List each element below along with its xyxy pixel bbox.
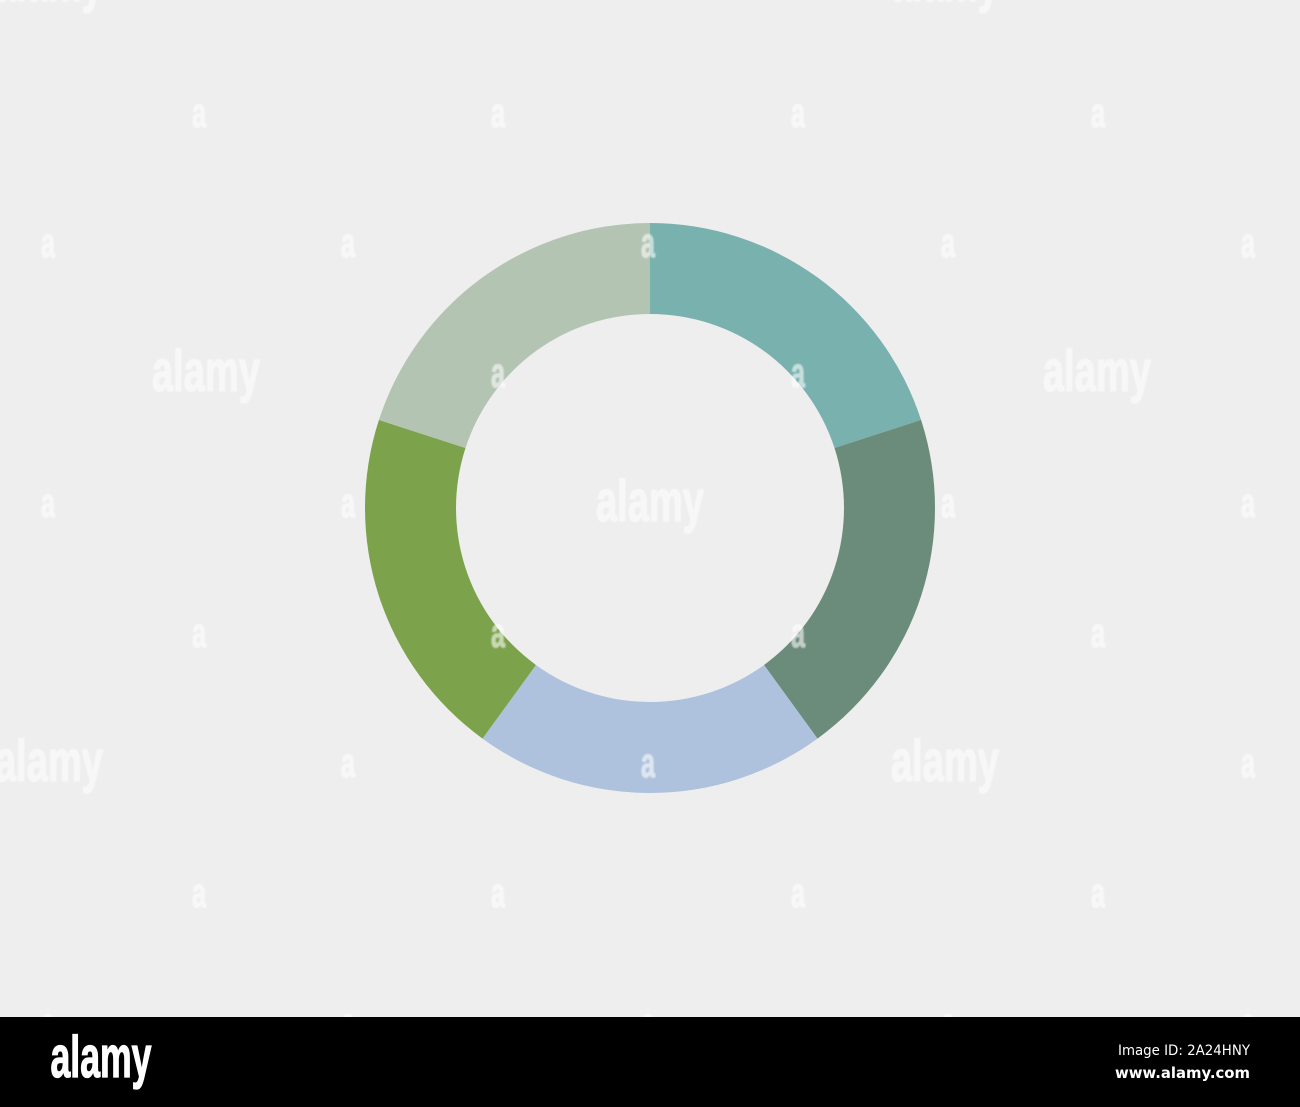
watermark pattern: a	[491, 869, 505, 916]
watermark pattern: a	[791, 349, 805, 396]
watermark pattern: a	[941, 999, 955, 1046]
segment: pale sage	[379, 223, 650, 448]
watermark pattern: a	[491, 89, 505, 136]
watermark pattern: a	[1241, 999, 1255, 1046]
donut chart	[365, 223, 935, 793]
footer logo: alamy	[50, 1025, 152, 1090]
footer bar	[0, 1017, 1300, 1107]
watermark pattern: a	[341, 999, 355, 1046]
segment: green	[365, 420, 536, 739]
watermark pattern: a	[941, 219, 955, 266]
segment: teal	[650, 223, 921, 448]
watermark pattern: a	[1241, 739, 1255, 786]
watermark pattern: a	[1091, 609, 1105, 656]
watermark pattern: a	[192, 89, 206, 136]
watermark pattern: a	[192, 869, 206, 916]
watermark pattern: a	[192, 609, 206, 656]
watermark pattern: a	[1091, 869, 1105, 916]
watermark pattern: a	[641, 219, 655, 266]
segment: light blue	[482, 665, 818, 793]
watermark pattern: a	[791, 609, 805, 656]
watermark pattern: a	[791, 869, 805, 916]
watermark pattern: a	[791, 89, 805, 136]
watermark pattern: a	[1241, 479, 1255, 526]
watermark pattern: a	[491, 349, 505, 396]
watermark pattern: alamy	[891, 729, 999, 794]
watermark pattern: a	[41, 479, 55, 526]
watermark pattern: a	[1091, 89, 1105, 136]
segment: dark green-grey	[764, 420, 935, 739]
watermark pattern: a	[1241, 219, 1255, 266]
watermark pattern: a	[41, 999, 55, 1046]
watermark pattern: a	[641, 999, 655, 1046]
watermark pattern: a	[491, 609, 505, 656]
watermark pattern: a	[641, 739, 655, 786]
watermark pattern: a	[941, 479, 955, 526]
watermark pattern: a	[341, 479, 355, 526]
watermark pattern: alamy	[152, 339, 260, 404]
watermark pattern: alamy	[1043, 339, 1151, 404]
website: www.alamy.com	[1115, 1064, 1250, 1082]
image id: Image ID: 2A24HNY	[1118, 1043, 1250, 1059]
watermark pattern: a	[41, 219, 55, 266]
watermark pattern: a	[341, 219, 355, 266]
watermark pattern: alamy	[596, 469, 704, 534]
watermark pattern: a	[341, 739, 355, 786]
